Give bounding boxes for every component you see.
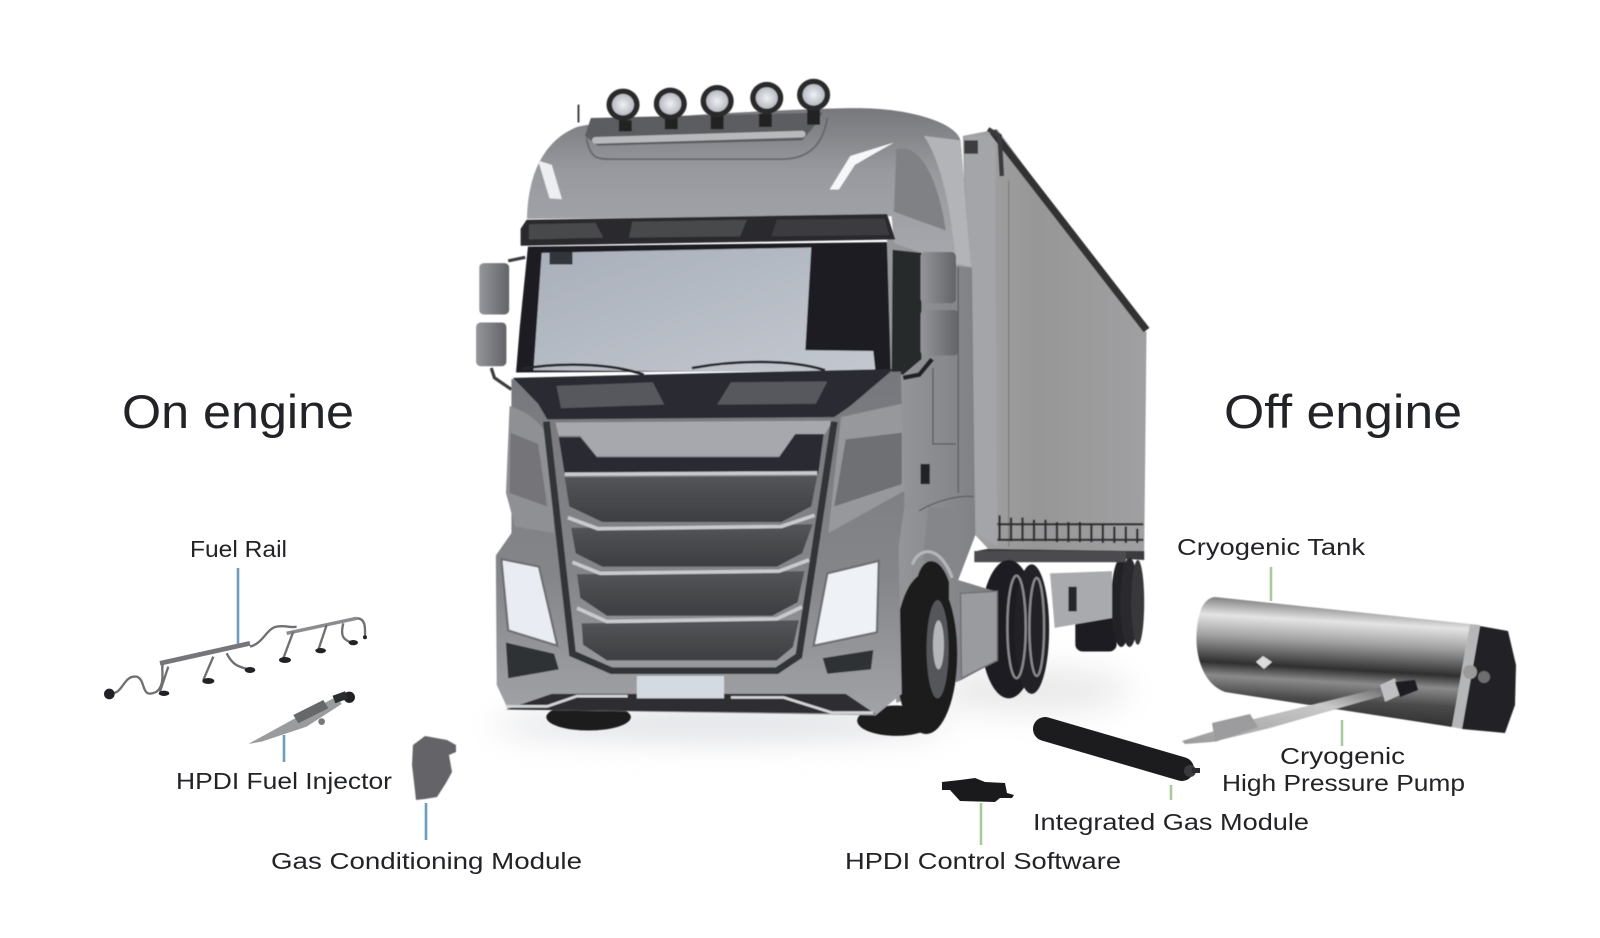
slat 3 [573, 560, 809, 616]
left fender [506, 406, 554, 533]
icon: control unit [942, 778, 1014, 802]
fog lights [506, 643, 873, 678]
component: Cryogenic High Pressure Pump [1182, 678, 1465, 796]
component: Fuel Rail [104, 536, 367, 699]
slat 2 [568, 515, 815, 567]
sun visor [521, 214, 895, 246]
lamp 1 [606, 89, 640, 121]
component: Integrated Gas Module [1033, 729, 1309, 835]
roof and fairing [527, 108, 972, 268]
light bar [585, 79, 830, 146]
label: Cryogenic Tank: Cryogenic Tank [1177, 534, 1366, 560]
label: HPDI Fuel Injector: HPDI Fuel Injector [176, 768, 392, 794]
trailer [963, 129, 1147, 560]
component: Cryogenic Tank [1177, 534, 1516, 733]
slat 4 [577, 607, 802, 660]
lamp 4 [750, 82, 783, 114]
label: Integrated Gas Module: Integrated Gas Module [1033, 809, 1309, 835]
component: Gas Conditioning Module [271, 736, 582, 874]
windshield [516, 242, 891, 375]
label: High Pressure Pump: High Pressure Pump [1222, 770, 1465, 796]
icon: high pressure pump [1182, 678, 1418, 744]
leader line: tank [1270, 567, 1272, 601]
rear drive wheels [980, 560, 1049, 698]
label: Cryogenic: Cryogenic [1280, 743, 1405, 769]
slat 1 [565, 473, 817, 522]
leader line: control software [980, 803, 982, 845]
icon: fuel rail harness [104, 618, 367, 699]
label: Fuel Rail: Fuel Rail [190, 536, 287, 562]
truck illustration [476, 79, 1147, 736]
leader line: gas module [1170, 785, 1172, 800]
grille [546, 422, 834, 671]
cab side [887, 239, 997, 703]
lamp 5 [797, 79, 830, 111]
dash band [513, 369, 894, 419]
left mirror [476, 257, 525, 389]
number plate [637, 676, 724, 698]
headlights [501, 559, 879, 646]
trailer wheels and underrun [974, 551, 1144, 651]
leader line: injector [283, 735, 285, 762]
component: HPDI Control Software [845, 778, 1121, 874]
section title: On engine: On engine [122, 385, 354, 438]
front wheel [857, 573, 957, 736]
lamp 2 [654, 88, 687, 120]
icon: fuel injector [248, 691, 355, 744]
side window [892, 250, 921, 375]
front body [496, 369, 905, 715]
icon: integrated gas module cylinder [1045, 729, 1200, 777]
truck ground shadow [490, 668, 1130, 737]
leader line: pump [1341, 720, 1343, 746]
lamp 3 [701, 85, 734, 117]
label: Gas Conditioning Module: Gas Conditioning Module [271, 848, 582, 874]
component: HPDI Fuel Injector [176, 691, 392, 794]
left front tyre [546, 704, 631, 730]
icon: cryogenic tank [1196, 597, 1516, 733]
leader line: gas conditioning [425, 803, 427, 840]
right mirror [903, 252, 958, 378]
right fender [828, 404, 905, 533]
section title: Off engine: Off engine [1224, 385, 1462, 438]
bumper [506, 676, 876, 714]
icon: gas conditioning module [412, 736, 456, 800]
antenna [576, 105, 580, 122]
label: HPDI Control Software: HPDI Control Software [845, 848, 1121, 874]
leader line: Fuel Rail [237, 568, 239, 644]
hood panel [556, 421, 833, 456]
